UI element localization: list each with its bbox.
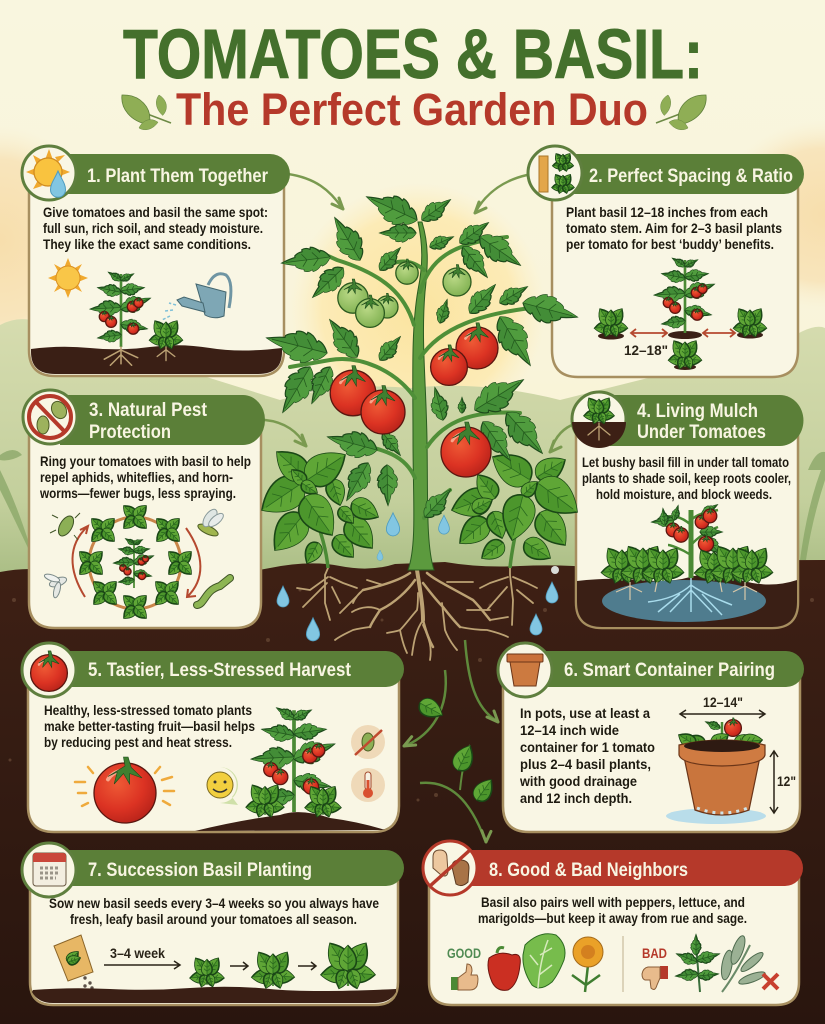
good label: GOOD [447, 945, 481, 961]
header bar [60, 154, 290, 194]
icon: thumb down [642, 966, 668, 989]
panel 1: plant them together [22, 146, 290, 376]
soil mound [195, 812, 385, 831]
header bar [60, 850, 404, 886]
icon: no bugs [23, 390, 77, 444]
body text: and 12 inch depth. [520, 790, 632, 806]
tomato plant [654, 255, 717, 333]
heading: 3. Natural Pest [89, 399, 207, 421]
panel 5: tastier harvest [22, 643, 404, 832]
panel 4: living mulch under tomatoes [572, 392, 803, 628]
icon: tomato [22, 643, 76, 697]
panel 3: natural pest protection [23, 390, 265, 628]
plant in pot [676, 718, 763, 752]
body text [49, 895, 379, 927]
main stem [408, 222, 434, 570]
moisture zone [602, 580, 766, 622]
timeline label: 3–4 week [110, 945, 165, 961]
body text: full sun, rich soil, and steady moisture. [43, 220, 263, 236]
header bar [535, 651, 804, 687]
panel 7: succession basil planting [22, 843, 404, 1005]
smiley bubble [207, 767, 238, 805]
body text: make better-tasting fruit—basil helps [44, 718, 255, 734]
background: sky [0, 0, 825, 600]
icon: thumb up [451, 964, 478, 990]
heading: 2. Perfect Spacing & Ratio [589, 165, 793, 187]
basil plants [594, 306, 767, 370]
leaf ornament right [656, 89, 713, 133]
basil plant [149, 318, 183, 361]
branches [290, 237, 540, 518]
red tomatoes [330, 323, 498, 477]
left basil plant [253, 442, 383, 568]
icon: calendar [22, 843, 76, 897]
basil ring diagram [76, 502, 195, 622]
body text: marigolds—but keep it away from rue and sage. [478, 910, 747, 926]
body text: fresh, leafy basil around your tomatoes all season. [70, 911, 357, 927]
icon: marigold [572, 937, 603, 992]
body text [43, 204, 268, 252]
body text: Sow new basil seeds every 3–4 weeks so you always have [49, 895, 379, 911]
icon: ruler and seedlings [528, 146, 582, 200]
title: TOMATOES & BASIL: [123, 15, 703, 93]
leaves [263, 184, 580, 523]
divider [622, 936, 624, 992]
tomato with sparkle rays [75, 757, 174, 823]
body text [582, 454, 791, 502]
tomato plant roots [335, 570, 508, 660]
seedling growth stages [190, 938, 376, 990]
blue roots [648, 578, 732, 615]
heading: 6. Smart Container Pairing [564, 659, 775, 681]
tomato plant [90, 269, 153, 365]
soil cross-section [577, 575, 797, 627]
background: green hills [0, 319, 825, 580]
panel 8: good and bad neighbors [423, 841, 803, 1005]
icon: pot [498, 643, 552, 697]
heading [637, 400, 766, 443]
body text [566, 204, 782, 252]
heading: 5. Tastier, Less-Stressed Harvest [88, 659, 351, 681]
icon: rue [675, 935, 720, 992]
icon: seedling with roots [572, 392, 626, 448]
background: side plants [0, 450, 825, 560]
right basil roots [480, 568, 537, 625]
body text: Healthy, less-stressed tomato plants [44, 702, 252, 718]
icon: hands with prohibition [423, 841, 477, 895]
arrow: panel 4 to plant [550, 424, 575, 452]
heading: Under Tomatoes [637, 421, 766, 443]
icon: sun [48, 258, 88, 298]
body text: They like the exact same conditions. [43, 236, 251, 252]
body text: repel aphids, whiteflies, and horn- [40, 469, 233, 485]
icon: sun and water drop [22, 146, 76, 200]
body text: with good drainage [519, 773, 637, 789]
icon: sage [719, 934, 767, 992]
body text: In pots, use at least a [520, 705, 650, 721]
spacing arrows [631, 329, 735, 337]
panel 6: smart container pairing [498, 643, 804, 832]
header bar [610, 395, 803, 446]
right basil plant [448, 444, 587, 568]
icon: red x [763, 974, 778, 989]
icon: no pest [351, 725, 385, 759]
icon: heat [351, 768, 385, 802]
heading: 7. Succession Basil Planting [88, 859, 312, 881]
body text [519, 705, 655, 806]
heading: 1. Plant Them Together [87, 165, 268, 187]
circular arrows [72, 526, 200, 597]
body text: worms—fewer bugs, less spraying. [39, 485, 236, 501]
width measure: 12–14" [703, 694, 743, 710]
soil strip [32, 985, 396, 1003]
pests [43, 507, 230, 605]
soil ground [0, 560, 825, 1024]
soil mounds [598, 331, 763, 370]
body text: Basil also pairs well with peppers, lettuce, and [481, 894, 745, 910]
header bar [60, 651, 404, 687]
spacing label: 12–18" [624, 342, 668, 358]
body text [44, 702, 255, 750]
heading [89, 399, 207, 443]
water droplets [277, 513, 559, 641]
green tomatoes [338, 259, 471, 327]
pale basil roots [616, 582, 757, 600]
water puddle [666, 808, 766, 824]
body text: container for 1 tomato [520, 739, 655, 755]
seed packet [54, 935, 94, 990]
body text: Ring your tomatoes with basil to help [40, 453, 251, 469]
background: peach glow and sun [0, 120, 825, 438]
heading: 8. Good & Bad Neighbors [489, 859, 688, 881]
subtitle: The Perfect Garden Duo [176, 84, 648, 135]
width measure [680, 694, 765, 718]
bad label: BAD [642, 945, 667, 961]
header bar [60, 395, 265, 445]
header bar [460, 850, 803, 886]
soil specks [8, 588, 814, 802]
body text: by reducing pest and heat stress. [44, 734, 232, 750]
icon: pepper [488, 948, 520, 990]
central tomato plant [263, 184, 580, 570]
leaf ornament left [115, 89, 171, 133]
terracotta pot [679, 740, 765, 815]
tomato plant [652, 501, 726, 578]
arrow: panel 3 to plant [265, 420, 306, 446]
body text: Give tomatoes and basil the same spot: [43, 204, 268, 220]
arrow: panel 1 to plant [288, 174, 343, 209]
body text: 12–14 inch wide [520, 722, 619, 738]
soil strip [31, 345, 282, 374]
body text: hold moisture, and block weeds. [596, 486, 772, 502]
arrow: vines down from roots [404, 640, 498, 842]
body text [39, 453, 251, 501]
body text [478, 894, 747, 926]
body text: per tomato for best ‘buddy’ benefits. [566, 236, 774, 252]
header bar [565, 154, 804, 194]
heading: 4. Living Mulch [637, 400, 758, 422]
panel 2: perfect spacing and ratio [528, 146, 804, 377]
tomato plant with basil [246, 704, 341, 818]
body text: tomato stem. Aim for 2–3 basil plants [566, 220, 782, 236]
icon: watering can [162, 274, 231, 320]
body text: Plant basil 12–18 inches from each [566, 204, 768, 220]
heading: Protection [89, 421, 171, 443]
height measure [770, 751, 796, 813]
height measure: 12" [777, 773, 796, 789]
left basil roots [297, 568, 357, 620]
arrow: panel 2 to plant [475, 175, 527, 213]
basil bushes [601, 543, 773, 584]
icon: lettuce [523, 934, 565, 988]
body text: plus 2–4 basil plants, [520, 756, 651, 772]
timeline arrow [104, 961, 180, 969]
